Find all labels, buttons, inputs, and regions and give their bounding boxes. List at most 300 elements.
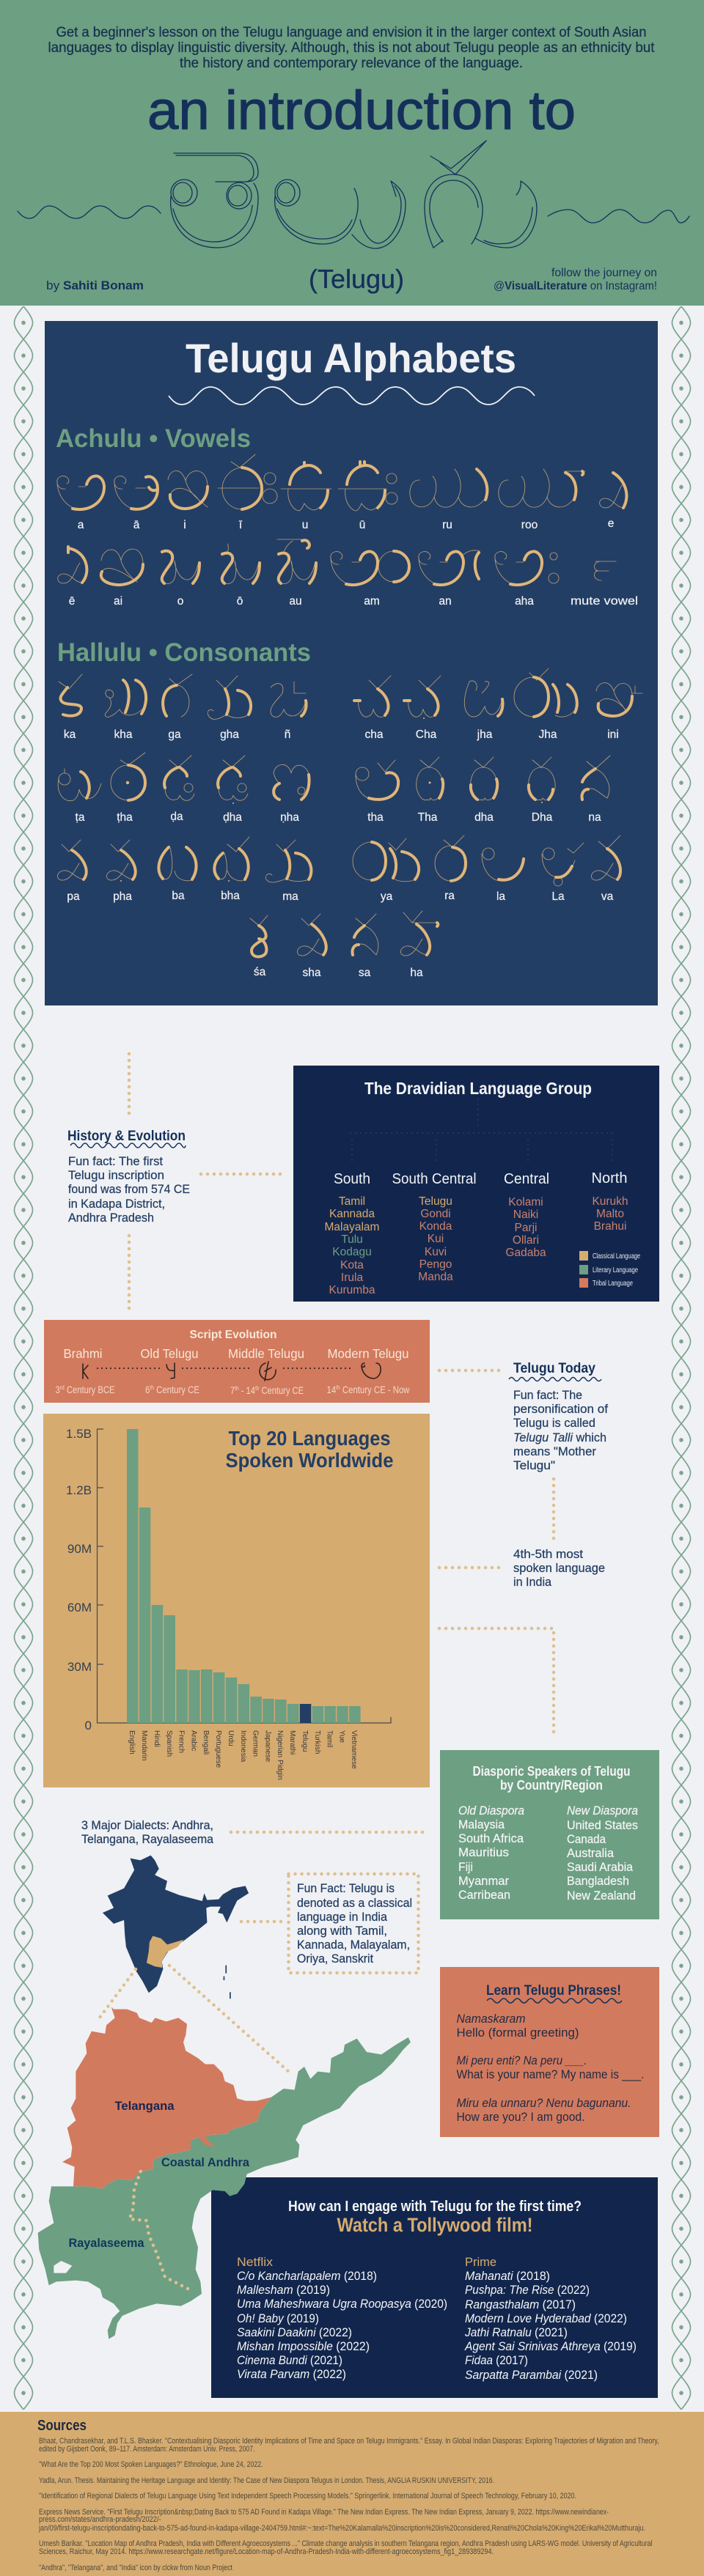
consonant labels: pa: [67, 890, 80, 903]
south languages: Kota: [340, 1259, 364, 1272]
new diaspora list: United States: [567, 1818, 638, 1832]
vowel letter: e: [600, 473, 626, 508]
language labels: [128, 1730, 358, 1780]
vowel letter: an: [419, 550, 480, 585]
consonant letter: ha: [400, 911, 438, 956]
column headings: South: [334, 1171, 370, 1187]
south central languages: Telugu: [419, 1195, 452, 1208]
region label: telangana: Telangana: [114, 2099, 175, 2113]
prime list: Prime: [465, 2255, 496, 2269]
family tree connectors: [351, 1099, 613, 1164]
consonant labels: ñ: [285, 728, 290, 741]
south languages: Tamil: [339, 1195, 365, 1208]
century captions: Century CE: [154, 1384, 199, 1395]
century captions: - 14: [239, 1385, 255, 1396]
consonant labels: ini: [607, 728, 619, 741]
new diaspora list: Bangladesh: [567, 1874, 629, 1888]
legend: Literary Language: [593, 1266, 638, 1274]
consonants heading: Hallulu • Consonants: [57, 638, 311, 667]
byline: by Sahiti Bonam: [46, 278, 144, 292]
vowel letter: aa: [114, 476, 158, 509]
vowel letter: ru: [410, 469, 487, 507]
north languages: Malto: [596, 1208, 624, 1220]
intro paragraph: Get a beginner's lesson on the Telugu language and envision it in the larger context of South Asian: [56, 25, 647, 40]
phrases: Hello (formal greeting): [456, 2026, 579, 2040]
central languages: Ollari: [513, 1234, 539, 1247]
language labels: Portuguese: [214, 1730, 222, 1768]
dotted timeline: [98, 1368, 353, 1369]
arrow: dotted connector to telugu today: [439, 1369, 503, 1372]
text block: speakers rank: spoken language: [513, 1561, 605, 1575]
prime list: Modern Love Hyderabad (2022): [465, 2311, 627, 2325]
phrases: Namaskaram: [456, 2012, 525, 2026]
south languages: Kannada: [329, 1208, 375, 1220]
consonant letter: sha palatal: [250, 915, 268, 957]
century captions: Century CE: [259, 1385, 304, 1396]
region: telangana: [62, 2007, 271, 2189]
script heading: Script Evolution: [189, 1329, 277, 1341]
text block: history and evolution: in Kadapa District,: [68, 1197, 165, 1211]
axis labels: 90M: [67, 1542, 92, 1556]
language labels: Nigerian Pidgin: [276, 1730, 284, 1780]
chart heading: [226, 1427, 393, 1472]
telugu wordmark illustration: [18, 141, 689, 248]
vowels heading: Achulu • Vowels: [56, 424, 251, 453]
consonant letter: nya: [271, 682, 307, 717]
axis labels: 0: [85, 1719, 92, 1732]
left vine border: [12, 306, 34, 2410]
consonant labels: dha: [474, 811, 494, 824]
consonant labels: Tha: [418, 811, 438, 824]
column headings: South Central: [392, 1171, 477, 1187]
intro paragraph: [48, 25, 655, 71]
consonant labels: sa: [359, 967, 371, 979]
language labels: Arabic: [189, 1730, 198, 1751]
consonant labels: ga: [168, 728, 181, 741]
main title: an introduction to: [147, 80, 576, 141]
axis labels: [66, 1427, 92, 1732]
region label: rayalaseema: Rayalaseema: [69, 2236, 144, 2250]
axes: [97, 1429, 391, 1723]
new diaspora list: Australia: [567, 1846, 615, 1860]
north languages: [592, 1195, 628, 1233]
script stages: Modern Telugu: [327, 1346, 409, 1361]
consonant letter: ini: [596, 683, 642, 716]
diaspora heading: [472, 1764, 631, 1793]
panel: sources: [0, 2412, 704, 2576]
language labels: Bengali: [202, 1730, 210, 1754]
language labels: English: [128, 1730, 136, 1754]
callout: classical language fun fact: Kannada, Malayalam,: [297, 1938, 410, 1952]
callout: classical language fun fact: [289, 1874, 418, 1973]
consonant letter: sa: [352, 914, 378, 955]
text block: history and evolution: [67, 1129, 190, 1225]
vowel letter: u: [281, 462, 331, 511]
chart heading: Top 20 Languages: [229, 1427, 390, 1450]
netflix list: C/o Kancharlapalem (2018): [237, 2269, 377, 2283]
text block: history and evolution: Andhra Pradesh: [68, 1211, 154, 1225]
consonant letter: kha: [105, 680, 146, 717]
arrow: dotted connector to diaspora: [439, 1628, 554, 1738]
consonant labels: Dha: [532, 811, 553, 824]
south central languages: Manda: [418, 1271, 453, 1283]
central languages: Gadaba: [505, 1247, 546, 1259]
consonant labels: la: [496, 890, 505, 903]
panel: diasporic speakers: [440, 1750, 659, 1919]
century captions: th: [150, 1384, 154, 1391]
consonant letter: Jha: [514, 668, 578, 717]
old diaspora list: Fiji: [458, 1860, 473, 1874]
new diaspora list: [567, 1804, 638, 1903]
central languages: Parji: [514, 1222, 538, 1234]
column headings: Central: [504, 1171, 549, 1187]
vowel labels: ā: [133, 519, 140, 531]
consonant letter: ba: [158, 847, 197, 881]
consonant labels: ka: [64, 728, 76, 741]
arrow: dotted connector down: [552, 1479, 555, 1540]
region: andhra and rayalaseema: [38, 2037, 411, 2339]
callout: classical language fun fact: along with Tamil,: [297, 1924, 387, 1938]
arrow: dotted connector down: [128, 1236, 131, 1310]
text block: telugu today: means "Mother: [513, 1444, 596, 1458]
vowel labels: i: [183, 519, 186, 531]
text block: dialects: [81, 1818, 214, 1846]
vowel labels: roo: [521, 519, 538, 531]
netflix list: Oh! Baby (2019): [237, 2311, 319, 2325]
vowel labels: a: [78, 519, 84, 531]
citations: "What Are the Top 200 Most Spoken Languages?" Ethnologue, June 24, 2022.: [39, 2460, 263, 2469]
arrow: dotted connector right: [201, 1173, 285, 1176]
consonant letter: ra: [435, 835, 466, 881]
citations: "Identification of Regional Dialects of Telugu Language Using Text Independent Speech Processing Models." Springerlink. International Journal of Speech Technology, February 10, 2020.: [39, 2492, 576, 2501]
consonant letter: Cha: [404, 676, 441, 719]
old diaspora list: Malaysia: [458, 1817, 505, 1831]
century captions: 3: [56, 1384, 61, 1395]
consonant labels: va: [601, 890, 614, 903]
consonant letter: bha: [214, 837, 249, 882]
language labels: German: [251, 1730, 260, 1757]
old diaspora list: Myanmar: [458, 1874, 509, 1888]
central languages: [505, 1196, 546, 1259]
century captions: th: [336, 1384, 340, 1391]
north languages: Brahui: [594, 1220, 626, 1233]
consonant letter: ma: [265, 840, 311, 882]
consonant labels: sha: [302, 967, 321, 979]
text block: telugu today: Telugu Talli which: [513, 1431, 606, 1444]
old diaspora list: Old Diaspora: [458, 1804, 524, 1817]
vowel labels: ū: [359, 519, 365, 531]
south central languages: [418, 1195, 453, 1283]
language labels: Japanese: [264, 1730, 271, 1763]
panel: tollywood film suggestions: [211, 2177, 658, 2398]
new diaspora list: New Diaspora: [567, 1804, 638, 1817]
text block: telugu today: Telugu": [513, 1458, 555, 1472]
consonant labels: jha: [477, 728, 493, 741]
language labels: Tamil: [326, 1730, 333, 1747]
right vine border: [670, 306, 692, 2410]
consonant letter: Tha: [417, 757, 443, 800]
script stages: [63, 1346, 409, 1361]
consonant labels: ra: [444, 890, 455, 902]
century captions: th: [235, 1385, 239, 1392]
phrases: [456, 2012, 644, 2124]
century captions: 7: [230, 1385, 236, 1396]
consonant labels: La: [551, 890, 565, 903]
consonant letter: pha: [107, 840, 136, 882]
consonant letter: ta: [58, 769, 101, 801]
arrow: dotted region boundary: [130, 2171, 191, 2290]
prime list: [464, 2255, 637, 2382]
heading wave: [169, 387, 535, 405]
consonant labels: ya: [381, 890, 393, 903]
consonant labels: na: [588, 811, 601, 824]
prime list: Sarpatta Parambai (2021): [465, 2368, 598, 2382]
consonant labels: ṭha: [117, 811, 133, 824]
old diaspora list: [458, 1804, 524, 1902]
century captions: rd: [60, 1384, 65, 1391]
text block: speakers rank: 4th-5th most: [513, 1547, 583, 1561]
consonant labels: [64, 728, 619, 979]
south languages: Malayalam: [325, 1221, 379, 1233]
tollywood call to action: Watch a Tollywood film!: [337, 2214, 532, 2236]
consonant letter: jha: [464, 681, 503, 717]
vowel letter: aha: [495, 552, 559, 585]
prime list: Agent Sai Srinivas Athreya (2019): [464, 2339, 637, 2353]
panel: learn telugu phrases: [440, 1967, 659, 2137]
phrases: Miru ela unnaru? Nenu bagunanu.: [456, 2096, 631, 2110]
netflix list: [237, 2255, 447, 2381]
vowel letter: ee: [58, 547, 87, 583]
consonant letter: cha: [354, 676, 391, 717]
text block: telugu today: [509, 1361, 608, 1472]
text block: history and evolution: Telugu inscription: [68, 1168, 164, 1182]
language labels: Yue: [337, 1730, 346, 1743]
consonant labels: ma: [282, 890, 298, 903]
netflix list: Mallesham (2019): [237, 2283, 330, 2297]
consonant labels: Cha: [416, 728, 437, 741]
text block: history and evolution: Fun fact: The first: [68, 1154, 163, 1168]
century captions: Century CE - Now: [340, 1384, 410, 1395]
follow note: [494, 267, 657, 292]
panel: dravidian language group: [293, 1066, 659, 1302]
script stages: Brahmi: [63, 1346, 103, 1361]
consonant letter: dha: [471, 757, 497, 800]
script stages: Middle Telugu: [228, 1346, 304, 1361]
netflix list: Uma Maheshwara Ugra Roopasya (2020): [237, 2297, 447, 2311]
consonant letter: gha: [208, 676, 251, 719]
arrow: dotted zoom line right: [169, 1966, 290, 2073]
arrow: dotted connector up: [128, 1054, 131, 1118]
diaspora heading: by Country/Region: [500, 1778, 603, 1793]
citations: "Andhra", "Telangana", and "India" icon by clckw from Noun Project: [39, 2564, 232, 2572]
intro paragraph: languages to display linguistic diversity. Although, this is not about Telugu people as an ethnicity but: [48, 40, 655, 56]
arrow: dotted connector dialects to diaspora: [231, 1831, 427, 1834]
language labels: Spanish: [165, 1730, 173, 1757]
axis labels: 60M: [67, 1601, 92, 1614]
consonant letter: da: [164, 756, 194, 800]
chart heading: Spoken Worldwide: [226, 1449, 393, 1472]
vowel labels: ai: [114, 595, 122, 608]
netflix list: Cinema Bundi (2021): [237, 2353, 342, 2367]
phrases: Mi peru enti? Na peru ___.: [456, 2053, 587, 2067]
citations: edited by Gijsbert Oonk, 89–117. Amsterdam: Amsterdam Univ. Press, 2007.: [39, 2445, 255, 2454]
text block: speakers rank: in India: [513, 1575, 552, 1589]
old diaspora list: Mauritius: [458, 1845, 509, 1859]
south languages: Kurumba: [329, 1284, 375, 1296]
language labels: Vietnamese: [350, 1730, 358, 1769]
language labels: Marathi: [288, 1730, 296, 1754]
region label: coastal andhra: Coastal Andhra: [161, 2155, 250, 2169]
citations: Sciences, Raichur, May 2014. https://www.researchgate.net/figure/Location-map-of-Andhra-Pradesh-India-with-different-agroecosystems_fig1_289389294.: [39, 2547, 494, 2556]
consonant labels: kha: [114, 728, 133, 741]
panel: top 20 languages chart: [43, 1414, 430, 1787]
central languages: Naiki: [513, 1208, 538, 1221]
vowel labels: aha: [515, 595, 534, 608]
south languages: [325, 1195, 379, 1296]
consonant letter: nha: [274, 764, 310, 800]
century captions: Century BCE: [65, 1384, 114, 1395]
new diaspora list: Saudi Arabia: [567, 1860, 634, 1874]
century captions: 14: [327, 1384, 338, 1395]
consonant labels: ṭa: [76, 811, 85, 824]
language labels: Indonesia: [239, 1730, 247, 1763]
consonant letter: tha: [356, 760, 398, 800]
consonant labels: cha: [365, 728, 384, 741]
vowel letter: i: [168, 470, 208, 509]
language labels: Mandarin: [140, 1730, 148, 1761]
century captions: 6: [145, 1384, 151, 1395]
legend: Classical Language: [593, 1252, 640, 1261]
netflix list: Mishan Impossible (2022): [237, 2339, 370, 2353]
legend: Tribal Language: [593, 1280, 633, 1288]
arrow: dotted connector map to fact: [241, 1920, 285, 1923]
script stages: Old Telugu: [141, 1346, 198, 1361]
vowel labels: ru: [442, 519, 452, 531]
vowel letter: mute vowel: [594, 561, 616, 580]
axis labels: 30M: [67, 1660, 92, 1674]
language labels: Turkish: [313, 1730, 321, 1754]
language labels: French: [177, 1730, 185, 1753]
prime list: Mahanati (2018): [465, 2269, 550, 2283]
language labels: Urdu: [227, 1730, 235, 1746]
callout: classical language fun fact: Fun Fact: Telugu is: [297, 1881, 395, 1895]
netflix list: Virata Parvam (2022): [237, 2367, 346, 2381]
vowel letter: roo: [499, 469, 585, 507]
vowel labels: an: [439, 595, 452, 608]
vowel labels: ī: [239, 519, 243, 531]
column headings: North: [591, 1170, 628, 1186]
new diaspora list: New Zealand: [567, 1889, 636, 1903]
prime list: Fidaa (2017): [465, 2353, 528, 2367]
vowel letter: uu: [338, 462, 397, 511]
text block: speakers rank: [513, 1547, 605, 1589]
consonant letter: na: [582, 756, 610, 800]
telugu transliteration: (Telugu): [309, 264, 404, 294]
vowel labels: u: [302, 519, 308, 531]
vowel letter: a: [57, 476, 104, 509]
text block: telugu today: Telugu Today: [513, 1361, 595, 1376]
text block: history and evolution: History & Evolution: [67, 1129, 186, 1144]
consonant labels: pha: [113, 890, 132, 903]
bars: [127, 1429, 361, 1723]
panel: telugu alphabets: [45, 321, 658, 1005]
netflix list: Netflix: [237, 2255, 274, 2269]
old diaspora list: Carribean: [458, 1888, 510, 1902]
arrow: dotted connector to rank: [439, 1566, 503, 1569]
century captions: th: [255, 1385, 259, 1392]
vowel labels: e: [608, 517, 614, 530]
consonant labels: ba: [172, 890, 185, 902]
vowel labels: [69, 517, 638, 608]
consonant letter: ka: [59, 674, 82, 716]
consonant letter: Dha: [529, 757, 555, 803]
follow note: @VisualLiterature on Instagram!: [494, 280, 657, 292]
vowel labels: o: [177, 595, 183, 608]
vowel letter: ai: [101, 549, 143, 585]
vowel letter: o: [162, 551, 199, 584]
text block: telugu today: Telugu is called: [513, 1416, 595, 1430]
south central languages: Pengo: [419, 1258, 452, 1271]
vowel labels: ō: [237, 595, 243, 608]
south central languages: Konda: [419, 1220, 452, 1233]
vowel labels: mute vowel: [571, 595, 638, 608]
alphabets heading: Telugu Alphabets: [186, 335, 516, 381]
vowel letter: au: [277, 539, 316, 584]
citations: Yadla, Arun. Thesis. Maintaining the Heritage Language and Identity: The Case of New Diaspora Telugus in London. Thesis, ANGLIA RUSKIN UNIVERSITY, 2016.: [39, 2476, 494, 2485]
prime list: Rangasthalam (2017): [465, 2298, 576, 2311]
text block: telugu today: personification of: [513, 1402, 608, 1416]
phrases: How are you? I am good.: [456, 2110, 585, 2124]
language labels: Telugu: [301, 1730, 309, 1752]
century captions: [56, 1384, 410, 1396]
consonant labels: śa: [254, 966, 266, 978]
panel: script evolution: [44, 1320, 430, 1403]
consonant letter: dha: [218, 756, 248, 804]
callout: classical language fun fact: denoted as a classical: [297, 1896, 412, 1910]
callout: classical language fun fact: Oriya, Sanskrit: [297, 1952, 373, 1966]
phrases: What is your name? My name is ___.: [456, 2067, 644, 2081]
consonant letter: La: [542, 843, 584, 886]
intro paragraph: the history and contemporary relevance of the language.: [180, 56, 523, 71]
vowel letter: am: [331, 551, 409, 585]
consonant letter: pa: [57, 840, 87, 880]
citations: [38, 2437, 659, 2572]
vowel labels: am: [364, 595, 380, 608]
south languages: Kodagu: [332, 1246, 372, 1258]
map: india: [103, 1856, 249, 1999]
consonant labels: ṇha: [280, 811, 299, 824]
citations: press.com/states/andhra-pradesh/2022/-: [39, 2515, 161, 2524]
script glyph progression: [83, 1362, 381, 1381]
consonant letter: la: [482, 848, 524, 881]
south central languages: Kuvi: [425, 1246, 447, 1258]
text block: history and evolution: found was from 574 CE: [68, 1182, 190, 1196]
vowel letter: ii: [218, 454, 277, 509]
consonant labels: ḍa: [170, 811, 183, 823]
old diaspora list: South Africa: [458, 1831, 524, 1845]
consonant letter: ya: [353, 838, 419, 882]
axis labels: 1.5B: [66, 1427, 92, 1441]
prime list: Jathi Ratnalu (2021): [464, 2325, 568, 2339]
arrow: dotted zoom line left: [98, 1969, 136, 2020]
consonant letter: sha: [298, 914, 326, 956]
consonant letter: va: [591, 835, 620, 880]
language labels: Hindi: [153, 1730, 161, 1747]
column headings: [334, 1170, 628, 1187]
south languages: Irula: [341, 1272, 363, 1284]
south languages: Tulu: [341, 1233, 363, 1246]
consonant letter: tha: [111, 753, 145, 800]
